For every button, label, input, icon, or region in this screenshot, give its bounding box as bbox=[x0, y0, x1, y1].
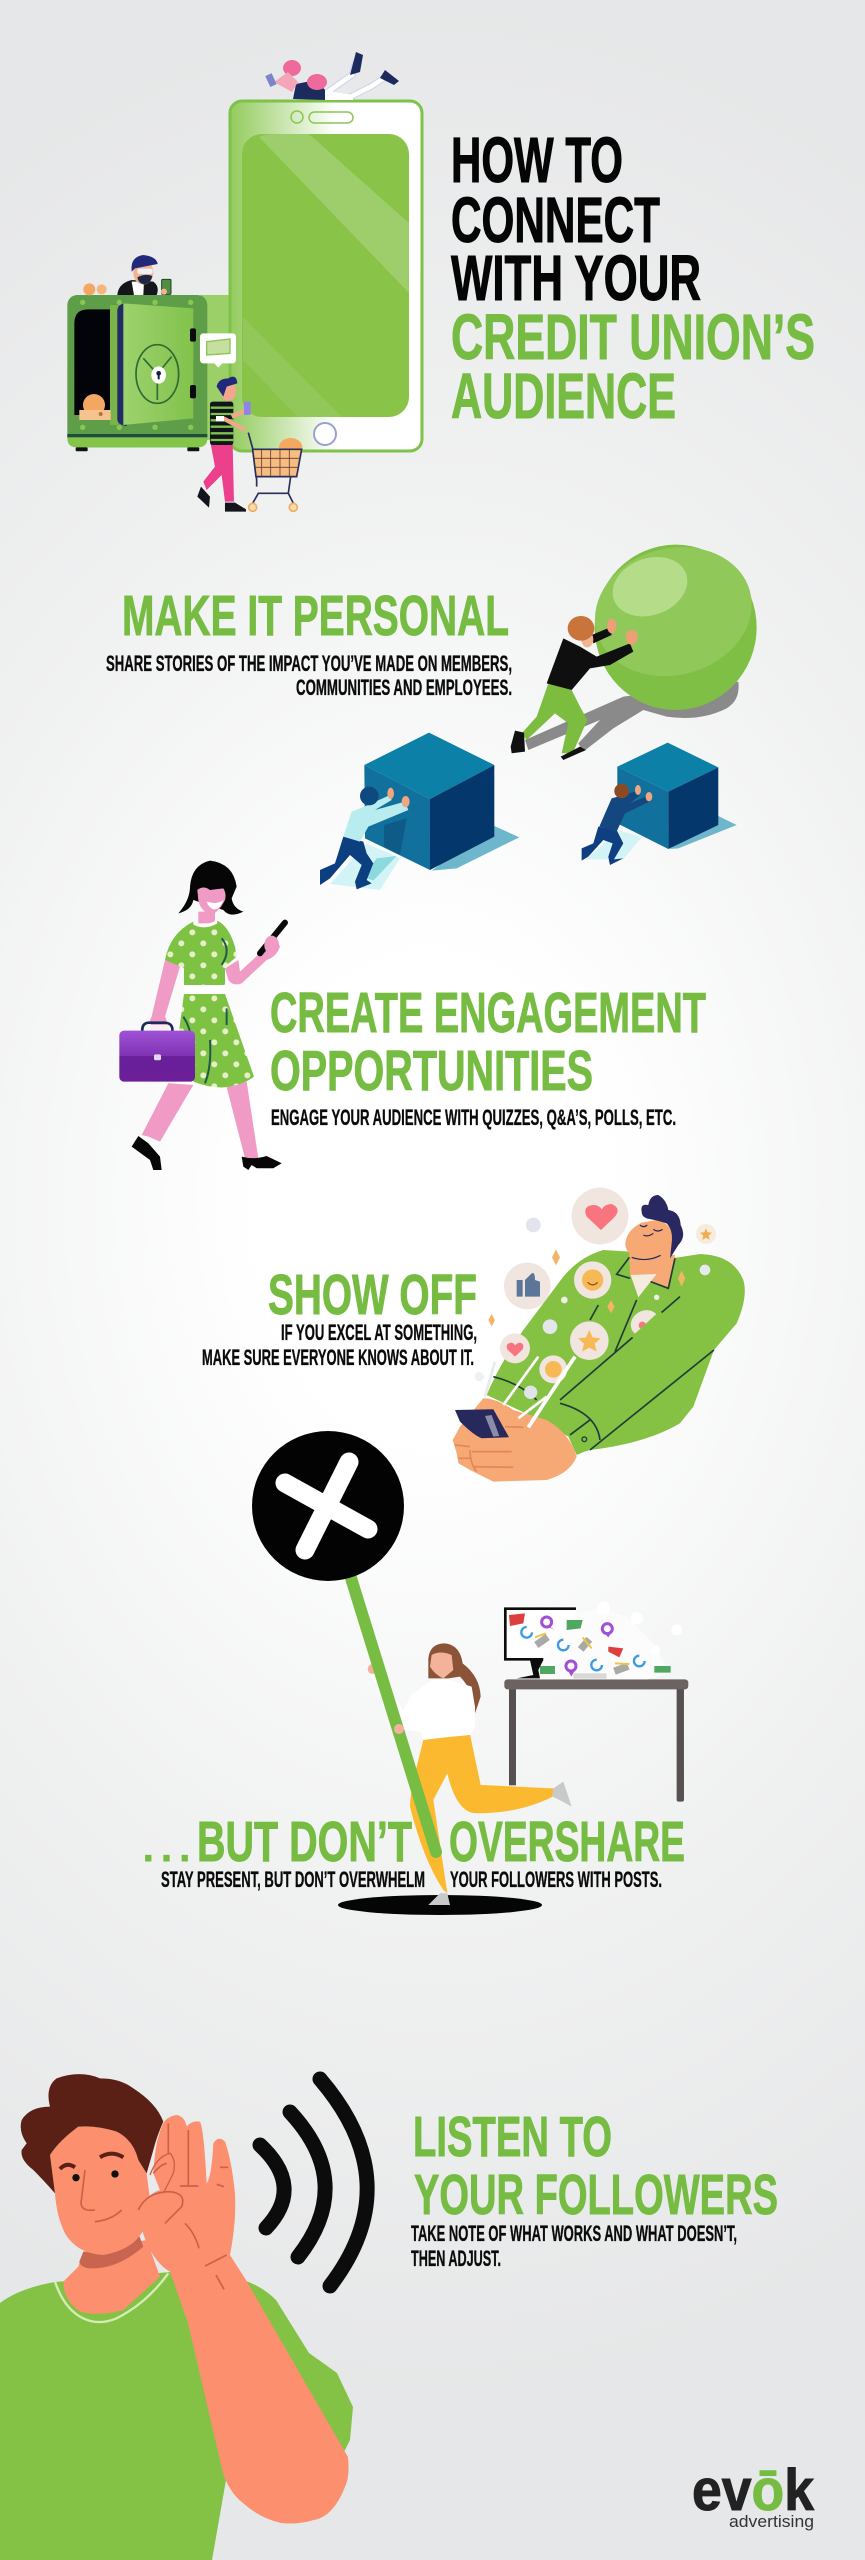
logo: advertising bbox=[729, 2512, 814, 2531]
illustration: man pushing small cube bbox=[582, 743, 737, 865]
section: listen heading bbox=[413, 2105, 778, 2227]
bubble: small smile bbox=[539, 1355, 567, 1383]
face bbox=[197, 887, 226, 915]
message pile bbox=[540, 1602, 682, 1679]
text: show off body: MAKE SURE EVERYONE KNOWS ABOUT IT. bbox=[202, 1345, 474, 1370]
neck bbox=[629, 1254, 675, 1288]
back hand bbox=[368, 1664, 378, 1674]
title: CONNECT bbox=[451, 184, 660, 256]
hair bbox=[428, 1643, 481, 1713]
illustration: woman holding no sign bbox=[252, 1431, 572, 1915]
illustration: woman with purse and phone bbox=[119, 861, 285, 1170]
bubble: star bbox=[570, 1321, 609, 1360]
text: make it personal body bbox=[106, 651, 512, 700]
face bbox=[50, 2126, 150, 2255]
face bbox=[430, 1652, 453, 1678]
section: make it personal heading: MAKE IT PERSONAL bbox=[122, 584, 509, 648]
ear bbox=[150, 2153, 174, 2193]
text: overshare body: STAY PRESENT, BUT DON’T OVERWHELM bbox=[161, 1867, 425, 1892]
text: listen body bbox=[411, 2221, 737, 2271]
right arm and hand bbox=[225, 935, 280, 984]
connector behind safe bbox=[200, 295, 240, 440]
section: overshare heading bbox=[143, 1810, 685, 1874]
motion lines bbox=[503, 1357, 547, 1418]
title: WITH YOUR bbox=[451, 242, 701, 314]
arm and hand bbox=[138, 2115, 349, 2524]
section: overshare heading: ... bbox=[143, 1828, 190, 1870]
section: overshare heading: OVERSHARE bbox=[449, 1810, 685, 1874]
bodice bbox=[165, 921, 237, 985]
pants bbox=[410, 1734, 553, 1893]
shirt bbox=[631, 1274, 657, 1297]
hand bbox=[453, 1398, 577, 1482]
section: show off heading: SHOW OFF bbox=[268, 1263, 477, 1327]
front hand bbox=[394, 1724, 404, 1734]
neck and collar bbox=[198, 912, 215, 923]
monitor bbox=[505, 1609, 576, 1678]
jacket lines bbox=[493, 1257, 714, 1450]
sign pole bbox=[351, 1578, 436, 1852]
bubble: heart bbox=[572, 1188, 628, 1244]
facial features bbox=[60, 2154, 123, 2222]
purse bbox=[119, 1023, 195, 1082]
text: make it personal body: COMMUNITIES AND EMPLOYEES. bbox=[296, 675, 512, 700]
text: overshare body: YOUR FOLLOWERS WITH POSTS. bbox=[450, 1867, 662, 1892]
text: listen body: THEN ADJUST. bbox=[411, 2246, 501, 2271]
logo: evōk bbox=[692, 2458, 815, 2523]
phone bbox=[260, 923, 285, 953]
illustration: man pushing large cube bbox=[320, 733, 519, 890]
back leg bbox=[142, 1083, 193, 1142]
bubble: smile bbox=[574, 1261, 611, 1299]
title: AUDIENCE bbox=[451, 360, 676, 432]
belt bbox=[184, 985, 225, 994]
section: listen heading: LISTEN TO bbox=[413, 2105, 612, 2169]
neck bbox=[63, 2240, 160, 2314]
illustration: man pushing green ball bbox=[511, 530, 766, 760]
shirt bbox=[0, 2272, 353, 2560]
hole bbox=[338, 1895, 542, 1915]
phone bbox=[455, 1409, 509, 1438]
icon: giant phone bbox=[230, 101, 422, 451]
text: show off body: IF YOU EXCEL AT SOMETHING, bbox=[281, 1320, 477, 1345]
bubble: small heart bbox=[500, 1333, 530, 1363]
shoe bbox=[553, 1782, 572, 1807]
text: show off body bbox=[202, 1320, 477, 1370]
illustration: man listening bbox=[0, 2074, 353, 2560]
foot bbox=[428, 1893, 450, 1905]
illustration: desk with overflowing monitor bbox=[504, 1602, 688, 1802]
sign bbox=[252, 1431, 404, 1581]
illustration: man with phone and social reactions bbox=[453, 1188, 745, 1482]
icon: sound waves bbox=[260, 2079, 367, 2286]
jacket bbox=[487, 1250, 745, 1455]
hair bbox=[641, 1195, 683, 1258]
social icons bbox=[509, 1613, 671, 1677]
section: create engagement heading: OPPORTUNITIES bbox=[270, 1039, 593, 1103]
badge bbox=[626, 1305, 673, 1343]
title: HOW TO bbox=[451, 124, 623, 196]
hair bbox=[21, 2074, 163, 2193]
top bbox=[370, 1672, 475, 1739]
collar bbox=[55, 2273, 168, 2322]
figure: man behind safe bbox=[83, 255, 171, 295]
icon: bank safe bbox=[67, 295, 207, 451]
bubble: thumbs up bbox=[504, 1263, 551, 1309]
sparkles bbox=[488, 1249, 685, 1327]
section: create engagement heading bbox=[270, 981, 706, 1103]
figure: shopper with cart bbox=[197, 377, 302, 512]
decorative dots bbox=[475, 1218, 710, 1399]
left arm and hand bbox=[150, 960, 180, 1023]
text: make it personal body: SHARE STORIES OF THE IMPACT YOU’VE MADE ON MEMBERS, bbox=[106, 651, 512, 676]
shoes bbox=[132, 1136, 162, 1170]
face bbox=[625, 1219, 674, 1260]
icon: money speech bubble bbox=[200, 333, 236, 368]
illustration: phone, safe and shoppers bbox=[67, 52, 422, 512]
front leg bbox=[227, 1082, 258, 1158]
hair bbox=[178, 861, 243, 915]
figure: girl lying on phone bbox=[265, 52, 399, 100]
bubble: small star bbox=[696, 1224, 716, 1244]
title bbox=[451, 124, 815, 432]
section: overshare heading: BUT DON’T bbox=[197, 1810, 412, 1874]
hand lines bbox=[138, 2123, 228, 2289]
skirt bbox=[178, 994, 254, 1087]
